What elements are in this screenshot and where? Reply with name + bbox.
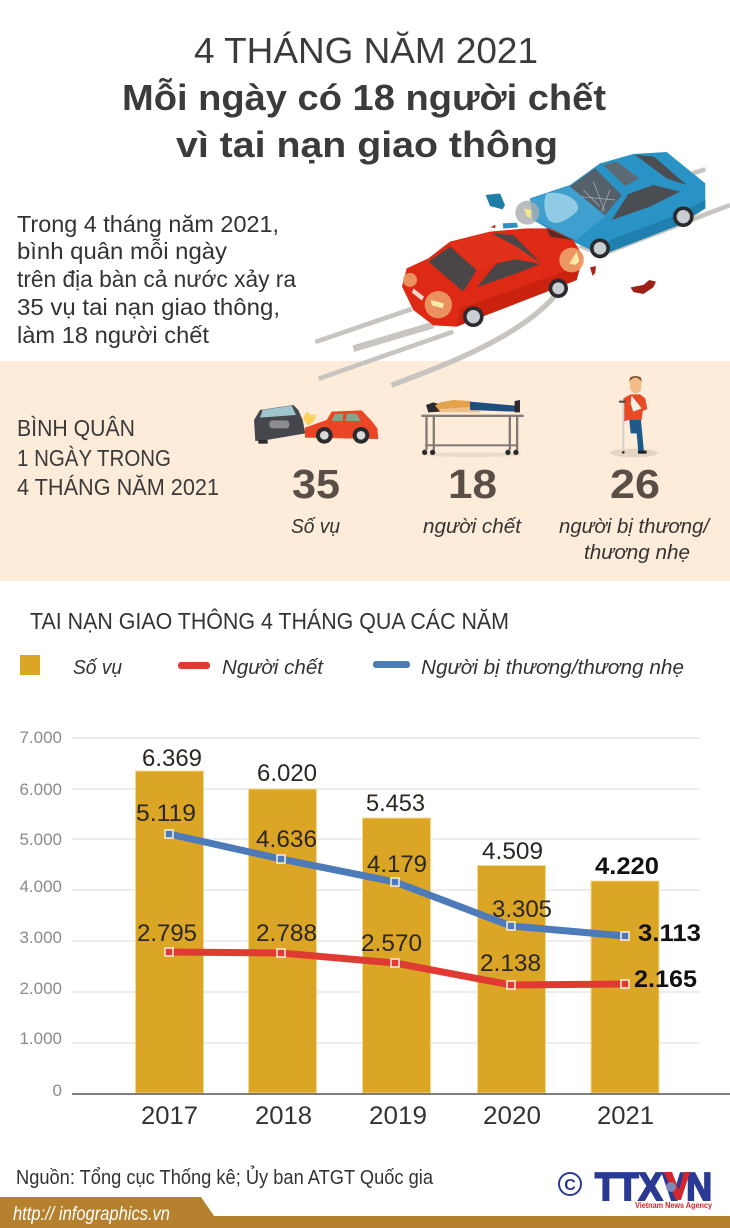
stat: accidents: 35: [292, 461, 340, 507]
stat: deaths: người chết: [423, 516, 522, 538]
icon: person on stretcher: [421, 400, 524, 457]
band heading: 4 THÁNG NĂM 2021: [17, 474, 219, 500]
footer url: http:// infographics.vn: [13, 1204, 170, 1225]
y axis labels: [19, 728, 62, 1100]
legend: [20, 655, 684, 679]
injured line: [165, 830, 629, 940]
icon: injured person with crutch: [610, 376, 658, 457]
stat: accidents: [291, 461, 340, 538]
y axis labels: 4.000: [19, 877, 62, 896]
x axis labels: 2019: [369, 1102, 427, 1130]
band heading: 1 NGÀY TRONG: [17, 445, 171, 471]
bars: [136, 771, 659, 1093]
stat: injured: [559, 461, 711, 564]
y axis labels: 7.000: [19, 728, 62, 747]
deaths line: [165, 948, 629, 989]
y axis labels: 5.000: [19, 830, 62, 849]
panel: daily average band: [0, 361, 730, 581]
stat: injured: người bị thương/: [559, 516, 711, 538]
red car: [402, 228, 583, 327]
intro text block: trên địa bàn cả nước xảy ra: [17, 266, 296, 292]
x axis labels: [141, 1102, 654, 1130]
logo: TTXVN: Vietnam News Agency: [635, 1200, 712, 1210]
title: 4 THÁNG NĂM 2021: [194, 30, 538, 71]
data labels: 3.113: [638, 920, 701, 947]
footer bar: [0, 1197, 730, 1228]
intro text block: bình quân mỗi ngày: [17, 238, 228, 264]
stat: deaths: [423, 461, 522, 538]
icon: two cars colliding: [254, 405, 378, 444]
stat: injured: thương nhẹ: [584, 542, 690, 564]
data labels: 2.570: [361, 930, 422, 957]
data labels: 2.795: [137, 920, 197, 947]
data labels: 4.509: [482, 838, 543, 865]
intro text block: Trong 4 tháng năm 2021,: [17, 211, 279, 237]
data labels: 2.165: [634, 966, 697, 993]
x axis labels: 2017: [141, 1102, 198, 1130]
data labels: 5.453: [366, 790, 425, 817]
y axis labels: 3.000: [19, 928, 62, 947]
data labels: 4.179: [367, 851, 427, 878]
x axis labels: 2018: [255, 1102, 312, 1130]
legend: Người chết: [222, 657, 324, 679]
y axis labels: 1.000: [19, 1029, 62, 1048]
data labels: 5.119: [136, 800, 196, 827]
band heading: [17, 415, 219, 500]
legend: Người bị thương/thương nhẹ: [421, 657, 684, 679]
x axis labels: 2021: [597, 1102, 654, 1130]
logo: TTXVN: TTXVN: [595, 1166, 712, 1209]
y axis labels: 2.000: [19, 979, 62, 998]
blue car: [530, 152, 705, 255]
data labels: 6.369: [142, 745, 202, 772]
chart heading: TAI NẠN GIAO THÔNG 4 THÁNG QUA CÁC NĂM: [30, 607, 509, 634]
logo: TTXVN: C: [564, 1177, 576, 1194]
y axis labels: 6.000: [19, 780, 62, 799]
intro text block: làm 18 người chết: [17, 322, 210, 348]
stat: accidents: Số vụ: [291, 516, 340, 538]
chart: accidents, deaths and injuries 2017-2021: [19, 728, 730, 1130]
data labels: [136, 745, 701, 993]
title: [122, 30, 606, 165]
data labels: 4.220: [595, 853, 659, 880]
stat: deaths: 18: [448, 461, 497, 507]
data labels: 6.020: [257, 760, 317, 787]
stat: injured: 26: [610, 461, 660, 507]
data labels: 2.138: [480, 950, 541, 977]
title: Mỗi ngày có 18 người chết: [122, 77, 606, 118]
icon: car crash illustration: [315, 152, 730, 385]
title: vì tai nạn giao thông: [176, 124, 558, 165]
data labels: 3.305: [492, 896, 552, 923]
legend: Số vụ: [73, 657, 122, 679]
data labels: 2.788: [256, 920, 317, 947]
y axis labels: 0: [53, 1081, 62, 1100]
x axis labels: 2020: [483, 1102, 541, 1130]
band heading: BÌNH QUÂN: [17, 415, 135, 441]
intro text block: 35 vụ tai nạn giao thông,: [17, 294, 280, 320]
intro text block: [17, 211, 296, 348]
source note: Nguồn: Tổng cục Thống kê; Ủy ban ATGT Quốc gia: [16, 1165, 434, 1189]
data labels: 4.636: [256, 826, 317, 853]
